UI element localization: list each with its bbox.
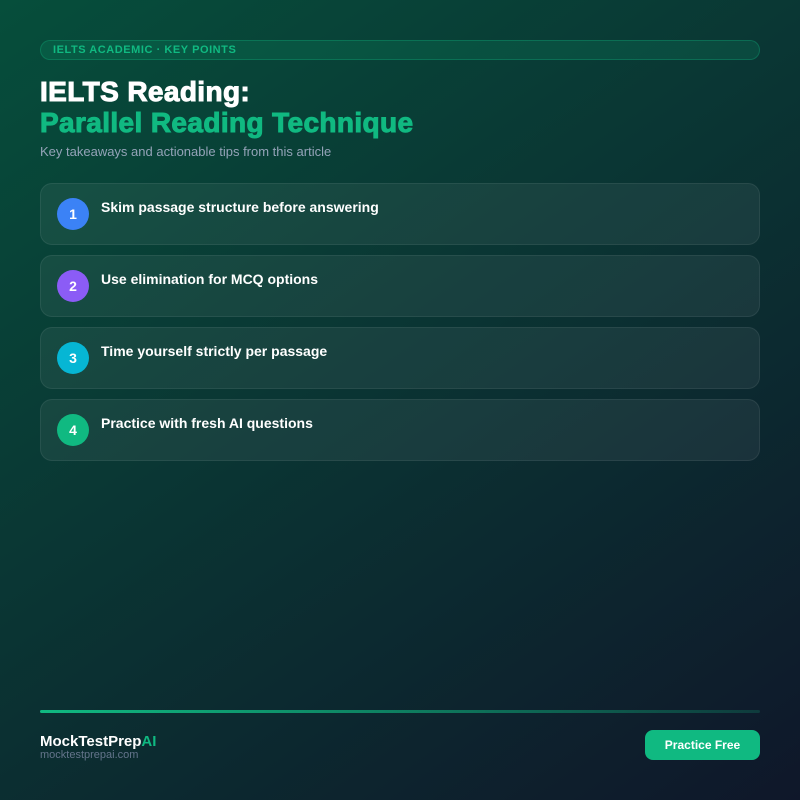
title: Parallel Reading Technique	[40, 107, 413, 138]
icon: number 3	[57, 342, 89, 374]
panel: tip 1	[40, 183, 760, 245]
button: practice free: Practice Free	[665, 738, 740, 752]
icon: number 3: 3	[69, 350, 77, 366]
brand name: MockTestPrepAI	[40, 733, 156, 750]
tip text 3: Time yourself strictly per passage	[101, 343, 327, 359]
title	[40, 76, 413, 138]
icon: number 4	[57, 414, 89, 446]
subtitle: Key takeaways and actionable tips from this article	[40, 144, 331, 159]
icon: number 2	[57, 270, 89, 302]
badge: category label	[40, 40, 760, 60]
icon: number 2: 2	[69, 278, 77, 294]
tip text 1: Skim passage structure before answering	[101, 199, 379, 215]
title: IELTS Reading:	[40, 76, 250, 107]
panel: tip 3	[40, 327, 760, 389]
icon: number 1: 1	[69, 206, 77, 222]
icon: number 4: 4	[69, 422, 77, 438]
panel: tip 4	[40, 399, 760, 461]
tip text 2: Use elimination for MCQ options	[101, 271, 318, 287]
badge: category label: IELTS ACADEMIC · KEY POINTS	[53, 44, 236, 56]
brand url: mocktestprepai.com	[40, 749, 138, 761]
tip text 4: Practice with fresh AI questions	[101, 415, 313, 431]
icon: number 1	[57, 198, 89, 230]
button: practice free	[645, 730, 760, 760]
panel: tip 2	[40, 255, 760, 317]
